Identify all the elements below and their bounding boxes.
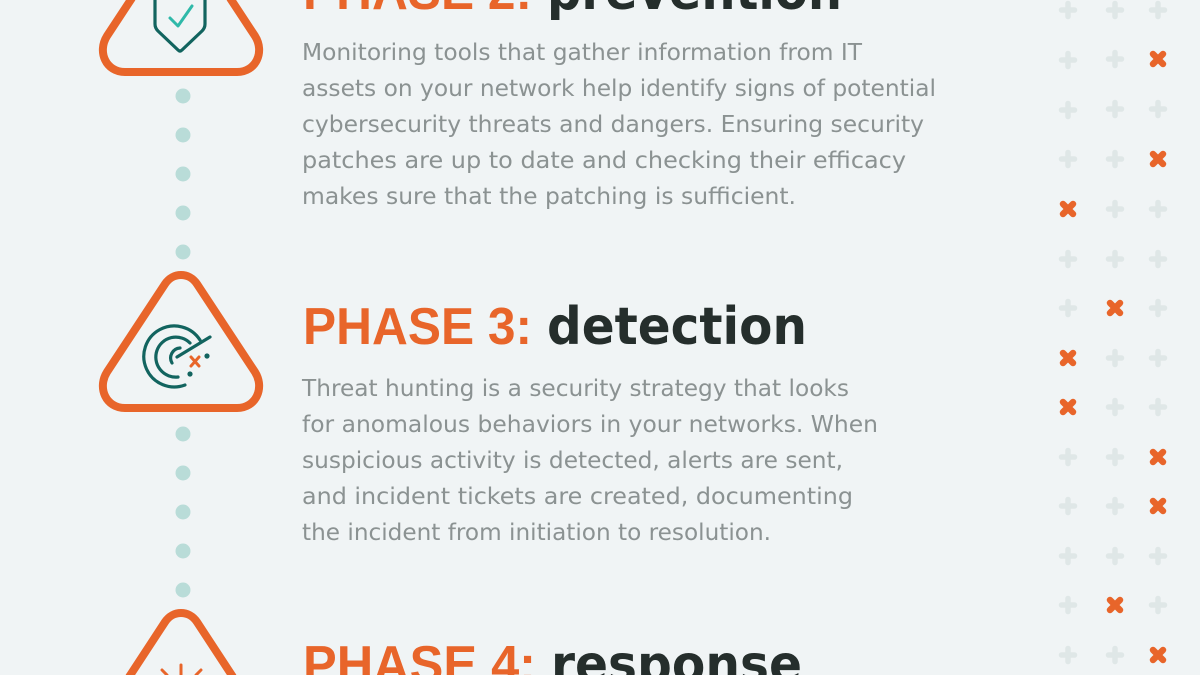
heading: phase 2: [303, 0, 842, 22]
text block: phase 3 description: for anomalous behaviors in your networks. When: [302, 410, 878, 438]
heading: phase 3: PHASE 3:: [303, 298, 532, 356]
panel: phase 4 response: [129, 613, 802, 675]
text block: phase 2 description: Monitoring tools that gather information from IT: [302, 38, 863, 66]
icon: burst in warning triangle: [129, 613, 233, 675]
text block: phase 2 description: makes sure that the patching is sufficient.: [302, 182, 796, 210]
text block: phase 2 description: cybersecurity threats and dangers. Ensuring security: [302, 110, 924, 138]
heading: phase 3: detection: [547, 297, 807, 357]
text block: phase 2 description: [302, 38, 936, 210]
heading: phase 3: [303, 297, 807, 357]
connector dots: phase 3 to 4: [176, 426, 190, 598]
panel: phase 3 detection: [103, 275, 878, 546]
text block: phase 3 description: [301, 374, 878, 546]
text block: phase 3 description: Threat hunting is a security strategy that looks: [301, 374, 849, 402]
text block: phase 3 description: and incident tickets are created, documenting: [302, 482, 853, 510]
text block: phase 3 description: the incident from initiation to resolution.: [302, 518, 771, 546]
heading: phase 4: [303, 635, 802, 675]
panel: phase 2 prevention: [103, 0, 936, 210]
text block: phase 3 description: suspicious activity is detected, alerts are sent,: [302, 446, 843, 474]
text block: phase 2 description: assets on your network help identify signs of potential: [302, 74, 936, 102]
text block: phase 2 description: patches are up to date and checking their efficacy: [302, 146, 906, 174]
icon: shield in warning triangle: [103, 0, 259, 72]
connector dots: phase 2 to 3: [176, 88, 190, 260]
icon: radar in warning triangle: [103, 275, 259, 408]
decorative grid: plus and cross marks: [1062, 4, 1164, 662]
